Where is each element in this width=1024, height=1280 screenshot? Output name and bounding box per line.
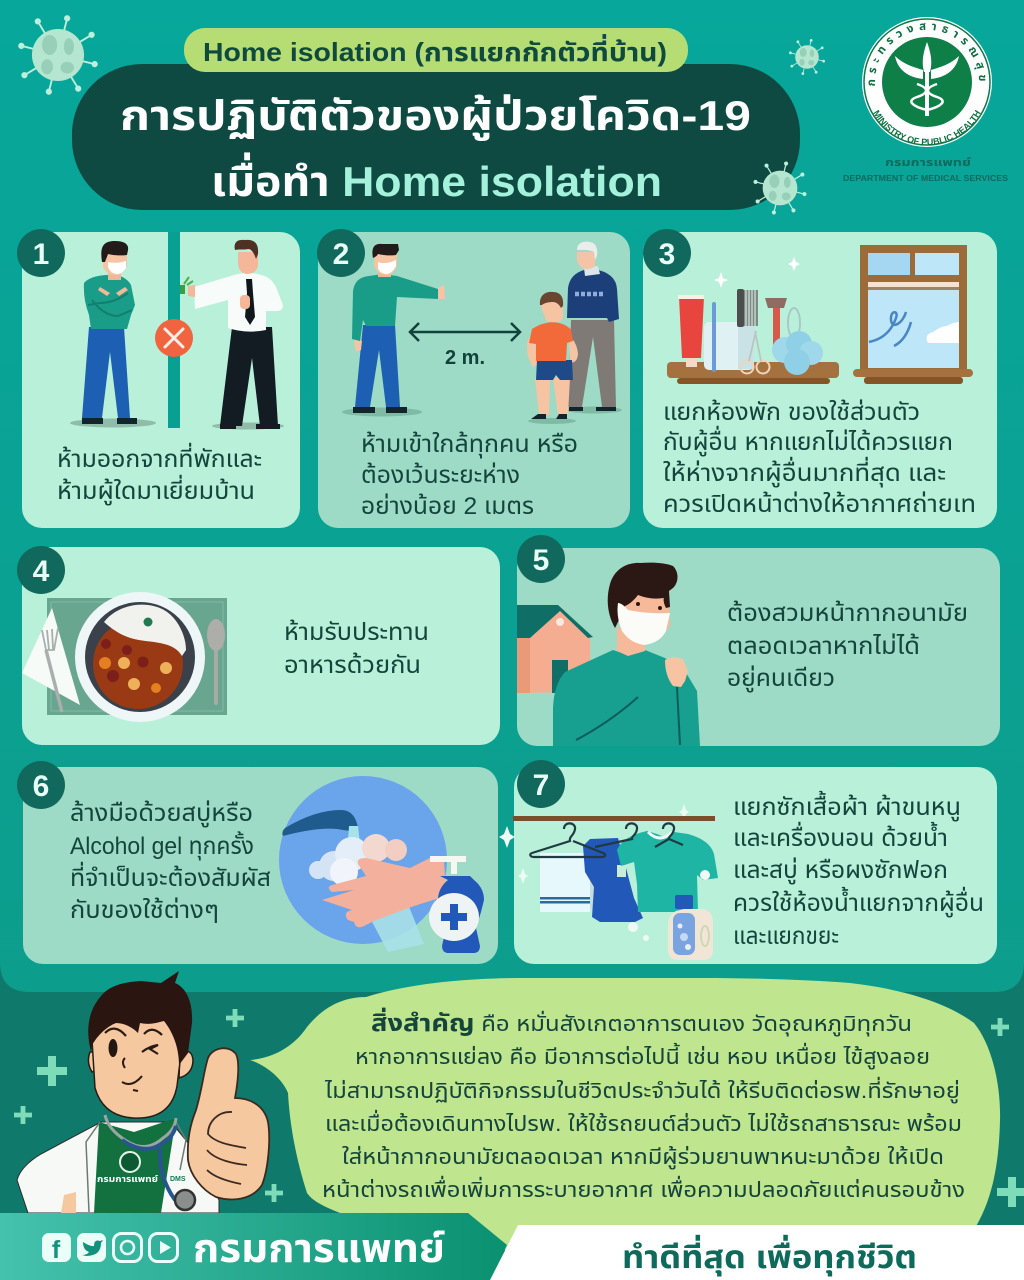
text 7: แยกซักเสื้อผ้า ผ้าขนหนู	[733, 790, 961, 822]
department name	[843, 157, 1009, 183]
text 1: ห้ามผู้ใดมาเยี่ยมบ้าน	[57, 474, 255, 506]
footer right slogan panel: ทำดีที่สุด เพื่อทุกชีวิต	[622, 1234, 917, 1276]
panel 2: keep distance	[317, 229, 630, 528]
number 2: 2	[333, 238, 349, 271]
number 3: 3	[659, 238, 675, 271]
footer left band	[0, 1213, 507, 1280]
text 7: และแยกขยะ	[733, 923, 839, 950]
panel 7: separate laundry	[499, 760, 997, 964]
number 6: 6	[33, 770, 49, 803]
bubble text: หากอาการแย่ลง คือ มีอาการต่อไปนี้ เช่น หอบ เหนื่อย ไข้สูงลอย	[355, 1042, 930, 1070]
bubble text: ไม่สามารถปฏิบัติกิจกรรมในชีวิตประจำวันได้ ให้รีบติดต่อรพ.ที่รักษาอยู่	[324, 1076, 960, 1104]
illustration: open window with breeze	[853, 245, 973, 384]
number 4: 4	[33, 555, 50, 588]
number 1: 1	[33, 238, 49, 271]
logo: ministry of public health	[862, 17, 992, 147]
arrow: 2 meter distance	[410, 323, 520, 369]
text 3: ให้ห่างจากผู้อื่นมากที่สุด และ	[663, 456, 946, 488]
title banner	[72, 28, 800, 210]
number 6	[17, 761, 65, 809]
logo: ministry of public health: กระทรวงสาธารณสุข	[868, 23, 986, 86]
department label: กรมการแพทย์	[193, 1227, 445, 1271]
text 6: Alcohol gel ทุกครั้ง	[70, 830, 254, 861]
number 5	[517, 535, 565, 583]
text 5: ต้องสวมหน้ากากอนามัย	[727, 600, 968, 627]
virus decoration top left	[10, 7, 106, 103]
arrow: 2 meter distance: 2 m.	[445, 347, 485, 369]
illustration: child	[527, 292, 578, 424]
title dark pill	[72, 64, 800, 210]
illustration: plate of curry rice	[22, 592, 227, 722]
green shirt	[94, 1118, 176, 1213]
panel 4: do not eat together	[17, 546, 500, 745]
virus decoration top right	[785, 35, 829, 79]
divider wall	[168, 232, 180, 428]
text 6: ล้างมือด้วยสบู่หรือ	[70, 799, 253, 828]
text 4	[284, 619, 429, 679]
text 5	[727, 600, 968, 693]
bubble text: และเมื่อต้องเดินทางไปรพ. ให้ใช้รถยนต์ส่วนตัว ไม่ใช้รถสาธารณะ พร้อม	[325, 1109, 962, 1136]
bubble text: สิ่งสำคัญ คือ หมั่นสังเกตอาการตนเอง วัดอุณหภูมิทุกวัน	[371, 1007, 912, 1037]
text 5: อยู่คนเดียว	[727, 664, 835, 693]
logo: ministry of public health: MINISTRY OF PUBLIC HEALTH	[873, 110, 981, 145]
number 5: 5	[533, 544, 549, 577]
number 7	[517, 760, 565, 808]
text 2	[361, 431, 578, 520]
text 2: อย่างน้อย 2 เมตร	[361, 492, 534, 520]
illustration: laundry on rail	[513, 816, 718, 960]
text 7: และเครื่องนอน ด้วยน้ำ	[733, 821, 948, 852]
thumbs up hand	[188, 1048, 269, 1199]
no entry icon	[155, 319, 193, 357]
department name: กรมการแพทย์	[885, 157, 971, 169]
illustration: masked man extending arm	[342, 244, 445, 416]
illustration: hand washing with soap	[279, 776, 484, 953]
illustration: masked man	[553, 563, 700, 746]
subtitle pill	[184, 28, 688, 72]
illustration: house	[517, 605, 593, 693]
subtitle pill: Home isolation (การแยกกักตัวที่บ้าน)	[203, 34, 667, 67]
text 3: แยกห้องพัก ของใช้ส่วนตัว	[663, 398, 920, 426]
text 1: ห้ามออกจากที่พักและ	[57, 442, 262, 473]
hair	[88, 971, 192, 1065]
title line 2: เมื่อทำ Home isolation	[211, 152, 662, 205]
number 2	[317, 229, 365, 277]
number 4	[17, 546, 65, 594]
text 4: อาหารด้วยกัน	[284, 652, 421, 679]
text 2: ห้ามเข้าใกล้ทุกคน หรือ	[361, 431, 578, 459]
text 1	[57, 442, 262, 506]
plus sign decorations	[14, 1009, 1024, 1207]
text 2: ต้องเว้นระยะห่าง	[361, 461, 520, 489]
eyes, brows and smile	[105, 1029, 162, 1054]
doctor character giving thumbs up	[17, 971, 269, 1213]
number 7: 7	[533, 769, 549, 802]
text 3: ควรเปิดหน้าต่างให้อากาศถ่ายเท	[663, 490, 976, 518]
number 1	[17, 229, 65, 277]
bubble text: หน้าต่างรถเพื่อเพิ่มการระบายอากาศ เพื่อความปลอดภัยแต่คนรอบข้าง	[322, 1175, 965, 1202]
face	[92, 1002, 181, 1118]
text 3: กับผู้อื่น หากแยกไม่ได้ควรแยก	[663, 425, 953, 457]
background: teal upper panel	[0, 0, 1024, 992]
illustration: personal items on shelf	[667, 257, 839, 384]
text 6: ที่จำเป็นจะต้องสัมผัส	[70, 861, 271, 892]
illustration: man in white shirt handing item	[180, 240, 284, 430]
panel 1: do not leave or receive visitors	[17, 229, 300, 528]
number 3	[643, 229, 691, 277]
social icons: f	[52, 1236, 61, 1264]
doctor character giving thumbs up: กรมการแพทย์	[97, 1174, 158, 1184]
illustration: masked man with crossed arms	[70, 241, 156, 428]
doctor character giving thumbs up: DMS	[170, 1176, 186, 1183]
left hand on hip	[61, 1192, 76, 1213]
text 7	[733, 790, 984, 950]
sparkles near laundry	[499, 804, 689, 884]
social icons	[42, 1233, 178, 1264]
text 7: และสบู่ หรือผงซักฟอก	[733, 856, 948, 885]
panel 5: wear a mask	[517, 535, 1000, 746]
text 6: กับของใช้ต่างๆ	[70, 896, 219, 924]
lab coat	[17, 1122, 219, 1213]
ears	[88, 1051, 193, 1078]
footer right slogan panel	[490, 1225, 1024, 1280]
title line 1: การปฏิบัติตัวของผู้ป่วยโควิด-19	[120, 92, 751, 141]
illustration: elderly man	[566, 242, 622, 414]
text 4: ห้ามรับประทาน	[284, 619, 429, 646]
speech bubble: key message	[250, 978, 1000, 1250]
bubble text	[322, 1007, 965, 1202]
text 3	[663, 398, 976, 518]
panel 6: wash hands	[17, 761, 498, 964]
virus decoration by title	[748, 156, 812, 220]
text 7: ควรใช้ห้องน้ำแยกจากผู้อื่น	[733, 886, 984, 918]
bubble text: ใส่หน้ากากอนามัยตลอดเวลา หากมีผู้ร่วมยานพาหนะมาด้วย ให้เปิด	[342, 1145, 944, 1170]
department name: DEPARTMENT OF MEDICAL SERVICES	[843, 174, 1009, 183]
panel 3: separate room and belongings	[643, 229, 997, 528]
text 5: ตลอดเวลาหากไม่ได้	[727, 632, 920, 660]
text 6	[70, 799, 271, 924]
